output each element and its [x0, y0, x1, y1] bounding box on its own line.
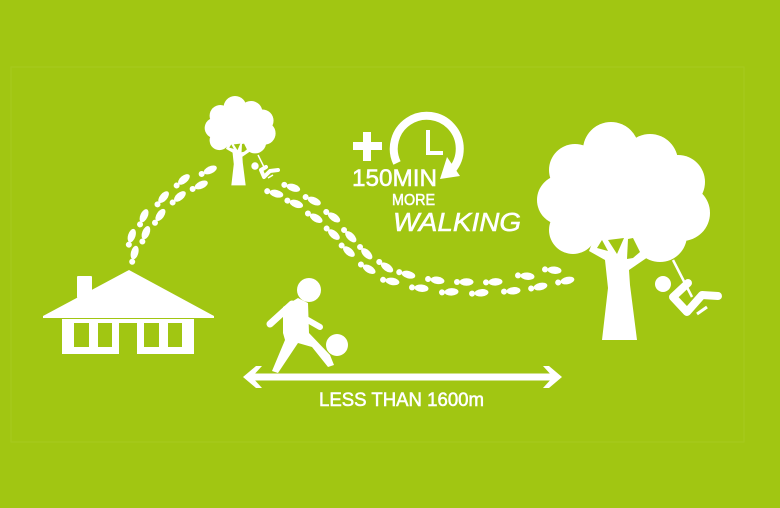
text: 150MIN: 150MIN [352, 165, 437, 192]
icon: clock with arrow [394, 116, 460, 179]
text: MORE: MORE [392, 192, 435, 209]
icon: small tree with swing [205, 96, 278, 185]
icon: plus sign [353, 132, 382, 161]
arrow: distance [243, 366, 562, 388]
footprints: path from small tree to large tree [263, 180, 575, 298]
icon: child kicking ball [270, 278, 348, 373]
text: distance label: LESS THAN 1600m [319, 390, 484, 411]
footprints: path from house to small tree [124, 164, 218, 266]
text: WALKING: WALKING [393, 207, 521, 237]
icon: house [43, 270, 214, 354]
icon: large tree with swing [537, 122, 718, 340]
